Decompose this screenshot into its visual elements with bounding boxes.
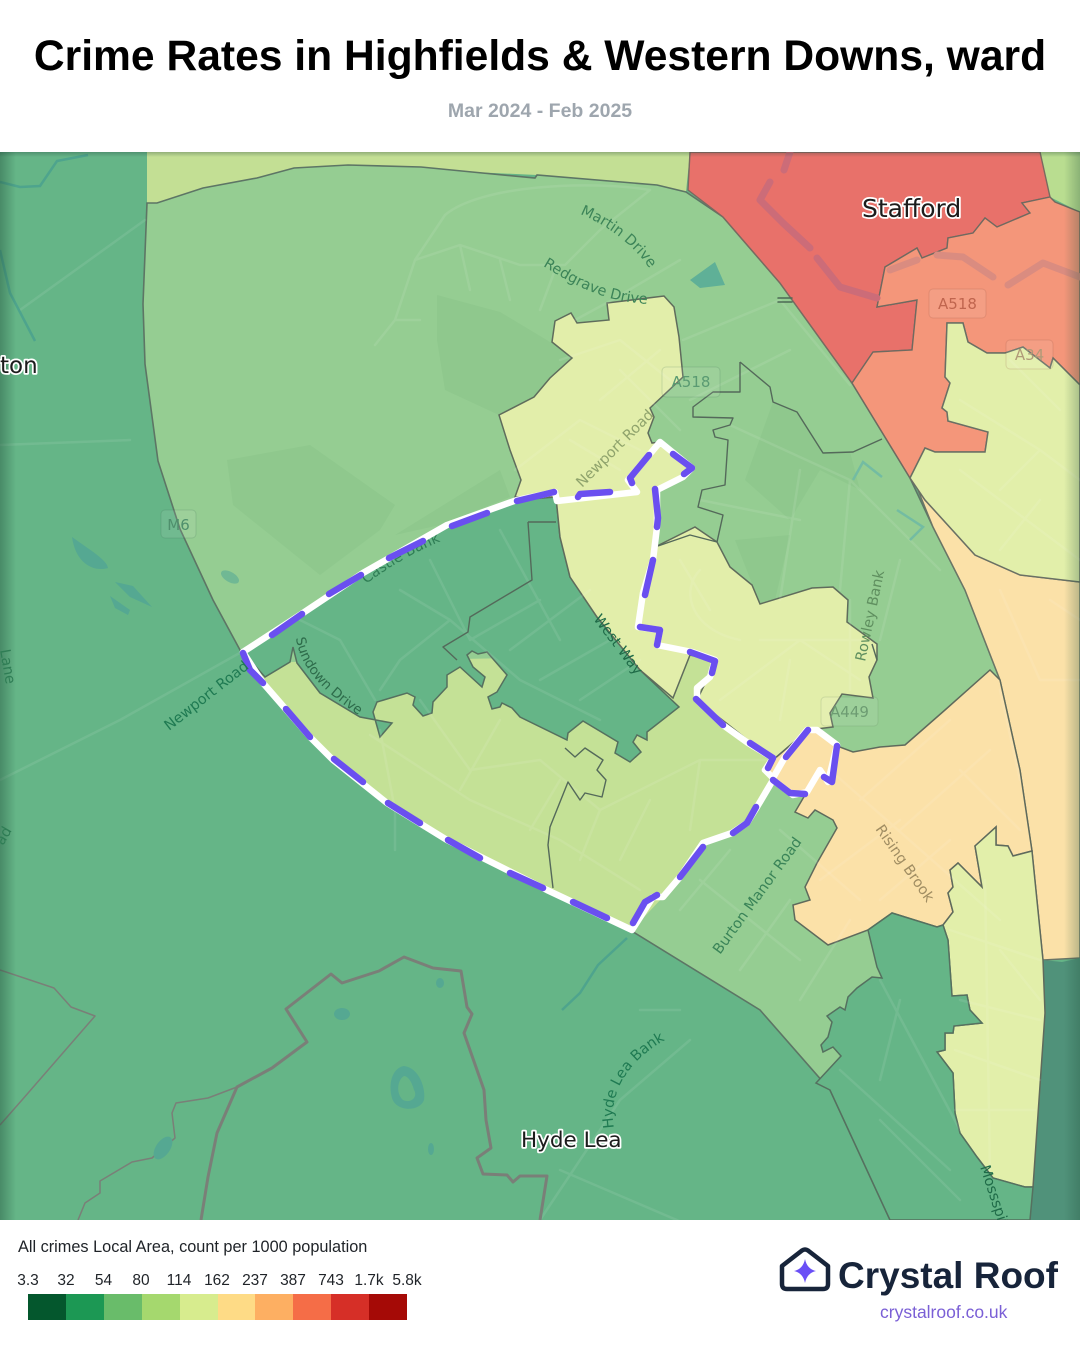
- area: central wedge light green: [143, 165, 1045, 1220]
- inner LSOA boundaries: [443, 362, 882, 888]
- title: Crime Rates in Highfields & Western Downs, ward: [34, 32, 1046, 80]
- road labels: [0, 205, 1011, 1220]
- legend scale labels: 162: [204, 1272, 230, 1289]
- legend scale labels: 387: [280, 1272, 306, 1289]
- label: Newport Road north: Newport Road: [574, 407, 657, 491]
- area: darker fields: [227, 295, 860, 604]
- legend scale labels: 80: [132, 1272, 150, 1289]
- shield: A518 north: A518: [672, 373, 710, 391]
- ward boundary white line: [243, 442, 837, 930]
- shield: A518 north: [662, 367, 720, 397]
- legend scale labels: 3.3: [17, 1272, 39, 1289]
- area: south east dark green: [816, 913, 1033, 1220]
- legend scale labels: 1.7k: [354, 1272, 384, 1289]
- legend scale labels: 237: [242, 1272, 268, 1289]
- place label: Hyde Lea: Hyde Lea: [521, 1128, 622, 1153]
- road shields: [161, 289, 1053, 726]
- legend colour bar: [28, 1294, 407, 1320]
- shield: A34: A34: [1015, 346, 1044, 364]
- label: Sundown Drive: Sundown Drive: [296, 637, 361, 714]
- shield: A518 east: [929, 289, 986, 318]
- legend scale labels: [17, 1272, 422, 1289]
- place label: Stafford: Stafford: [862, 194, 961, 223]
- label: Rowley Bank: Rowley Bank: [853, 568, 888, 663]
- place label: partial town: ton: [0, 353, 38, 379]
- label: Hyde Lea Bank: Hyde Lea Bank: [602, 1033, 665, 1128]
- area: Stafford red: [688, 152, 1050, 383]
- label: Redgrave Drive: Redgrave Drive: [544, 258, 647, 304]
- area: ward south yellow-green: [250, 655, 773, 930]
- area: Stafford orange-red: [852, 197, 1080, 478]
- area: top right corner: [1040, 152, 1080, 212]
- label: Burton Manor Road: Burton Manor Road: [710, 835, 805, 957]
- logo icon: house with star: [780, 1247, 830, 1292]
- area: south east dark strip: [1030, 958, 1080, 1220]
- label: Rising Brook: Rising Brook: [872, 822, 937, 906]
- shield: A449: A449: [830, 703, 869, 721]
- legend title: All crimes Local Area, count per 1000 population: [18, 1238, 367, 1256]
- subtitle: date range: Mar 2024 - Feb 2025: [448, 100, 632, 122]
- legend scale labels: 32: [57, 1272, 75, 1289]
- legend scale labels: 5.8k: [392, 1272, 422, 1289]
- shield: A34: [1006, 340, 1053, 369]
- shield: A518 east: A518: [938, 295, 977, 313]
- website link: crystalroof.co.uk: [880, 1302, 1007, 1322]
- label: Martin Drive: Martin Drive: [581, 205, 654, 268]
- area: east of railway orange: [918, 490, 1080, 960]
- rivers: [0, 155, 923, 1010]
- shield: M6: M6: [167, 516, 190, 534]
- railway ring road markings: [760, 152, 1080, 302]
- label: West Way: West Way: [590, 612, 646, 679]
- water features: [72, 262, 725, 1163]
- label: Newport Road west: Newport Road: [162, 659, 252, 734]
- logo wordmark: Crystal Roof: [838, 1255, 1058, 1296]
- edge shading: [0, 152, 1080, 1220]
- base area: low crime green: [0, 152, 1080, 1220]
- shield: M6: [161, 510, 196, 538]
- ward boundary purple dashes: [243, 454, 837, 923]
- area: ward north dark green: [243, 497, 679, 762]
- area: Rising Brook orange: [768, 670, 1032, 945]
- choropleth map: [0, 152, 1080, 1220]
- road network: [0, 185, 1080, 1230]
- label: Castle Bank: Castle Bank: [362, 534, 440, 582]
- shield: A449: [821, 697, 878, 726]
- area: top band yellow-green: [147, 152, 690, 203]
- south boundary lines: [0, 957, 547, 1220]
- area: south east yellow: [937, 827, 1045, 1187]
- area: central yellow: [499, 296, 877, 760]
- legend scale labels: 743: [318, 1272, 344, 1289]
- legend scale labels: 54: [95, 1272, 112, 1289]
- area: north east yellow: [910, 323, 1080, 582]
- legend scale labels: 114: [167, 1272, 191, 1289]
